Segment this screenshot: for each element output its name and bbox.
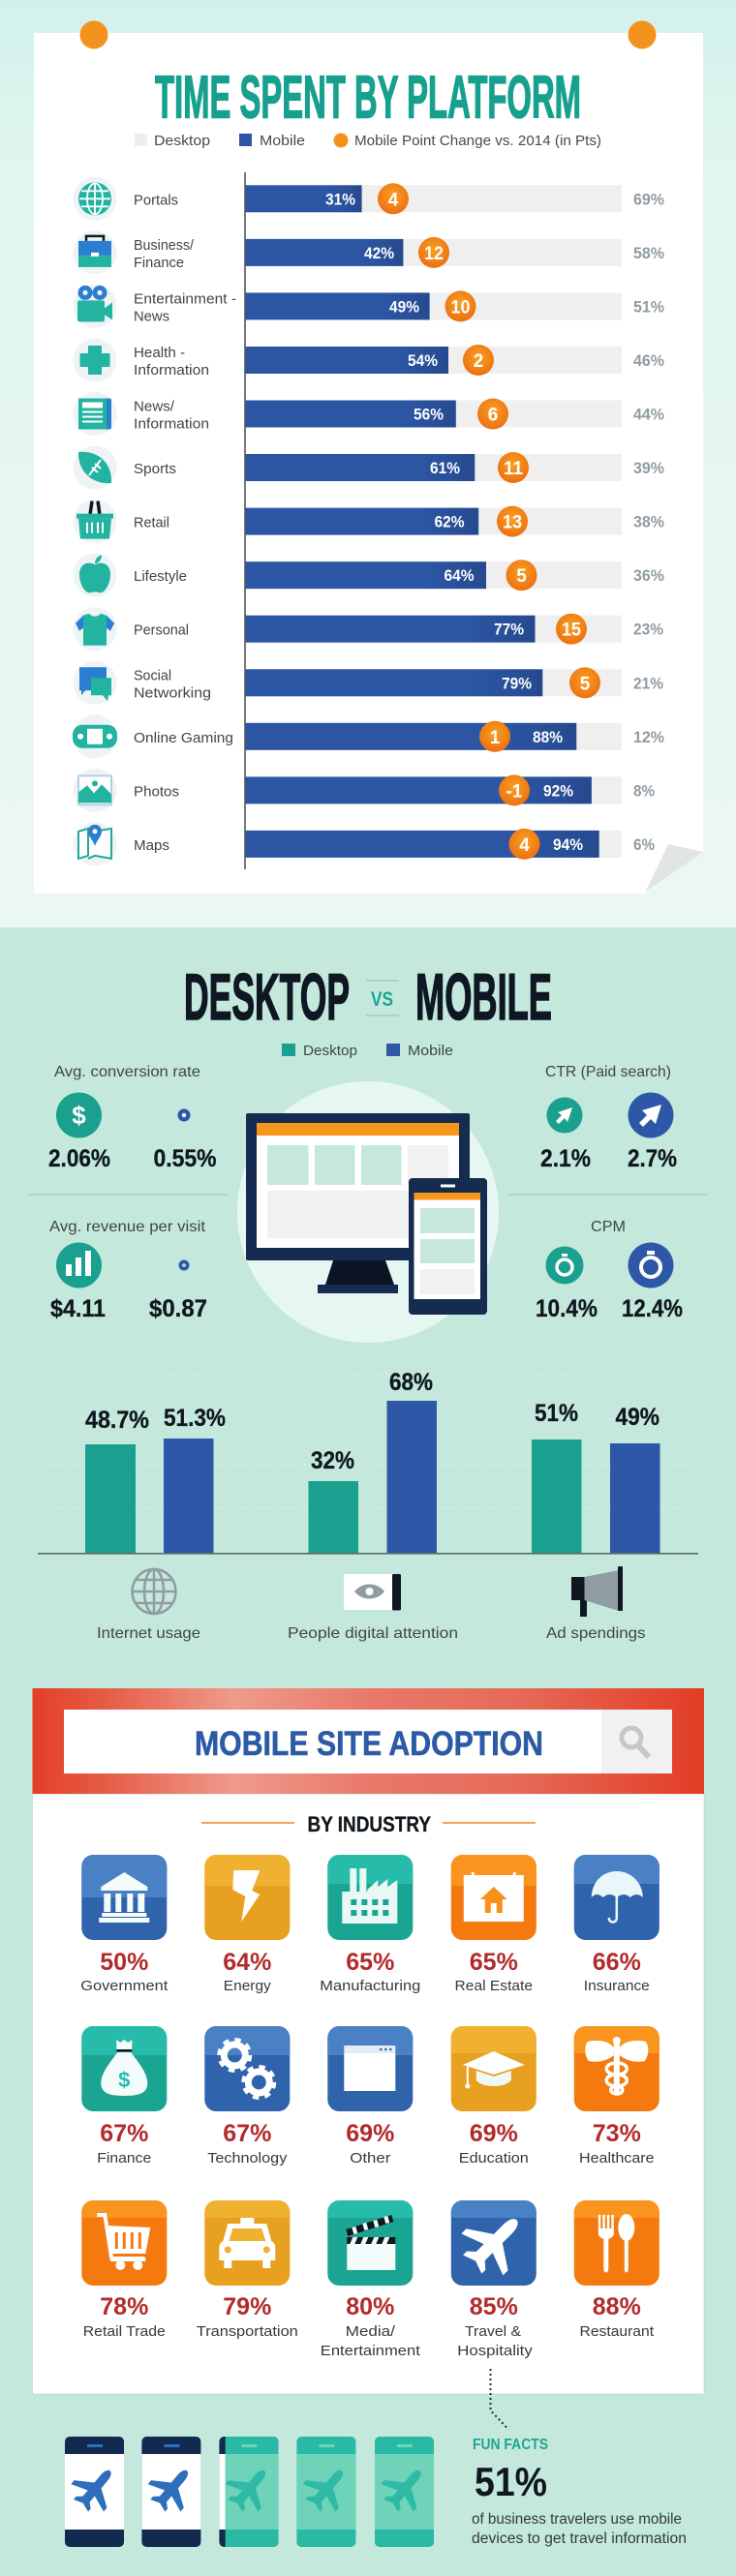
bar chart: usage, attention, ad spend: 48.7% [85,1407,149,1434]
row: Social Networking 79%: 21% [633,675,663,692]
stat: avg conversion rate [48,1064,217,1172]
bar chart: usage, attention, ad spend: 51% [535,1400,578,1427]
label: Education [459,2120,529,2167]
stat: CTR paid search: 2.7% [628,1145,677,1172]
label: Real Estate [455,1949,533,1994]
row: Lifestyle 64% [74,554,664,597]
icon: film camera [74,285,116,328]
stat: CTR paid search [540,1064,677,1172]
row: News/Information 56%: 6 [488,405,498,426]
tile: Education 69% [451,2026,537,2111]
row: Maps 94%: Maps [134,837,169,854]
label: Other: 69% [346,2120,394,2147]
illustration: desktop and phone [237,1081,499,1343]
tile: Transportation 79% [204,2200,290,2286]
stat: CPM [536,1219,683,1322]
bar chart: usage, attention, ad spend [38,1369,698,1555]
label: Media/Entertainment [321,2293,421,2359]
tile: Finance 67% [81,2026,167,2111]
bar chart: usage, attention, ad spend: 49% [616,1404,659,1431]
row: News/Information 56%: 56% [414,407,444,424]
label: Finance [97,2120,151,2167]
tile: Government 50% [81,1855,167,1940]
row: Photos 92%: -1 [506,781,523,802]
row: Retail 62%: 13 [503,513,522,533]
divider right [507,1194,707,1196]
icon: t-shirt [74,607,116,651]
stat: avg conversion rate: $ [72,1101,86,1130]
background: lower sections [0,927,736,2576]
row: Personal 77% [74,607,663,651]
stat: CPM: 10.4% [536,1295,598,1322]
row: Health - Information 54% [74,339,664,381]
row: Health - Information 54%: 46% [633,352,664,370]
phone 1 [65,2437,127,2547]
row: Health - Information 54%: 2 [474,351,483,372]
row: Entertainment - News 49%: News [134,308,169,324]
tile: Energy 64% [204,1855,290,1940]
stat: CPM: 12.4% [622,1295,683,1322]
row: Business/Finance 42%: 42% [364,245,394,262]
label: Media/Entertainment: Entertainment [321,2343,421,2359]
label: Retail Trade [83,2293,166,2340]
row: Social Networking 79%: Social [134,667,171,683]
label: Restaurant: 88% [593,2293,641,2320]
panel: fun fact phones [65,2437,687,2547]
label: ad spendings: Ad spendings [546,1625,645,1642]
label: Travel & Hospitality [457,2293,533,2359]
bar chart: usage, attention, ad spend: 32% [311,1447,354,1474]
icon: newspaper [74,392,116,436]
label: internet usage: Internet usage [97,1625,200,1642]
header: search bar: MOBILE SITE ADOPTION [195,1725,543,1763]
row: Entertainment - News 49%: 51% [633,298,664,316]
divider left [28,1194,228,1196]
tile: Insurance 66% [574,1855,659,1940]
row: Maps 94% [74,822,655,865]
bar chart: usage, attention, ad spend: 68% [389,1369,433,1396]
row: Retail 62% [74,500,664,543]
tile: Technology 67% [204,2026,290,2111]
phone 4 [296,2437,358,2547]
label: Education: Education [459,2150,529,2167]
row: Portals 31%: 4 [388,190,399,210]
background: top section [0,0,736,927]
label: Education: 69% [470,2120,518,2147]
label: Restaurant [580,2293,655,2340]
label: Energy [223,1949,271,1994]
row: Entertainment - News 49%: 49% [389,298,419,316]
subheading: by industry: BY INDUSTRY [308,1812,431,1836]
row: News/Information 56% [74,392,664,436]
stat: avg conversion rate: Avg. conversion rate [54,1064,200,1080]
label: Retail Trade: 78% [100,2293,148,2320]
row: Portals 31%: 31% [325,191,355,208]
tile: Other 69% [327,2026,413,2111]
row: Business/Finance 42%: 58% [633,245,664,262]
legend [282,1043,453,1059]
row: Portals 31%: 69% [633,191,664,208]
tile: Finance 67%: $ [118,2068,130,2092]
label: Healthcare [579,2120,655,2167]
row: Retail 62%: 62% [434,514,465,531]
label: Other [346,2120,394,2167]
row: Entertainment - News 49%: Entertainment - [134,290,236,307]
icon: football [74,445,116,490]
fun facts text: devices to get travel information [472,2531,687,2547]
row: Social Networking 79% [74,661,663,705]
fun facts text: FUN FACTS [473,2437,548,2453]
row: Social Networking 79%: 5 [580,674,591,694]
stat: CPM: CPM [591,1219,626,1235]
row: Health - Information 54%: 54% [408,352,438,370]
row: Sports 61%: Sports [134,461,176,477]
label: Manufacturing: Manufacturing [320,1978,420,1994]
label: Technology: Technology [207,2150,288,2167]
row: Photos 92%: 8% [633,782,655,800]
row: Health - Information 54%: Health - [134,345,185,361]
icon: globe [74,177,116,221]
row: Business/Finance 42% [74,230,664,274]
stat: CTR paid search: 2.1% [540,1145,591,1172]
stat: avg revenue per visit: $0.87 [149,1295,207,1322]
icon: medical cross [74,339,116,381]
row: Maps 94%: 4 [519,835,530,856]
heading: VS [371,988,393,1011]
label: Energy: Energy [224,1978,271,1994]
row: Online Gaming 88%: 1 [490,728,501,748]
row: Social Networking 79%: Networking [134,684,211,701]
row: Maps 94%: 6% [633,836,655,854]
row: Retail 62%: 38% [633,514,664,531]
label: Manufacturing: 65% [346,1949,394,1976]
card [33,1794,704,2394]
row: Online Gaming 88%: 12% [633,729,664,746]
phone 2 [141,2437,203,2547]
legend: Mobile [260,133,305,149]
row: Personal 77%: 23% [633,621,663,639]
row: Personal 77%: 77% [494,621,524,639]
row: Health - Information 54%: Information [134,362,209,379]
label: Finance: 67% [100,2120,148,2147]
callout connector: dotted line [490,2369,507,2428]
label: Healthcare: 73% [593,2120,641,2147]
icon: handheld console [73,714,117,758]
row: Photos 92%: Photos [134,783,179,800]
legend [135,133,601,149]
legend: Mobile [408,1043,453,1059]
row: Photos 92% [74,769,655,812]
label: Media/Entertainment: Media/ [346,2323,396,2340]
stat: avg revenue per visit: Avg. revenue per visit [49,1219,206,1235]
row: Business/Finance 42%: Finance [134,255,184,271]
label: Real Estate: 65% [470,1949,518,1976]
tile: Manufacturing 65% [327,1855,413,1940]
legend: Desktop [303,1043,357,1059]
label: Technology: 67% [223,2120,271,2147]
stat: CTR paid search: CTR (Paid search) [545,1064,671,1080]
stat: avg conversion rate: 2.06% [48,1145,110,1172]
row: Maps 94%: 94% [553,836,583,854]
panel: desktop vs mobile [28,960,707,1642]
heading: DESKTOP [184,960,350,1034]
icon: eye on phone [344,1574,401,1611]
label: Insurance: Insurance [584,1978,650,1994]
legend: Mobile Point Change vs. 2014 (in Pts) [354,133,601,149]
tile: Travel & Hospitality 85% [451,2199,537,2286]
icon: chat bubbles [74,661,116,705]
label: Technology [207,2120,288,2167]
label: Insurance: 66% [593,1949,641,1976]
tile: Healthcare 73% [574,2026,659,2111]
label: Travel & Hospitality: Hospitality [457,2343,533,2359]
row: Lifestyle 64%: Lifestyle [134,568,187,585]
tile: Real Estate 65% [451,1855,537,1940]
row: News/Information 56%: 44% [633,407,664,424]
row: Business/Finance 42%: 12 [424,244,444,264]
label: Transportation: Transportation [197,2323,298,2340]
row: Photos 92%: 92% [543,782,573,800]
row: Entertainment - News 49% [74,285,664,328]
panel: time spent by platform [34,21,703,894]
icon: briefcase [74,230,116,274]
row: Portals 31% [74,177,664,221]
fun facts text: 51% [475,2459,547,2504]
label: Other: Other [350,2150,390,2167]
row: Online Gaming 88% [73,714,664,758]
label: Transportation: 79% [223,2293,271,2320]
bar chart: usage, attention, ad spend: 51.3% [164,1405,226,1432]
row: Online Gaming 88%: 88% [533,729,563,746]
row: Entertainment - News 49%: 10 [451,297,471,318]
label: Energy: 64% [223,1949,271,1976]
label: Transportation [197,2293,298,2340]
stat: avg revenue per visit: $4.11 [50,1295,106,1322]
label: Government: 50% [100,1949,148,1976]
row: Retail 62%: Retail [134,515,169,531]
label: Travel & Hospitality: Travel & [465,2323,521,2340]
card with folded corner [34,33,703,894]
row: Lifestyle 64%: 36% [633,567,664,585]
row: Sports 61%: 11 [504,459,523,479]
label: Retail Trade: Retail Trade [83,2323,166,2340]
row: Online Gaming 88%: Online Gaming [134,730,233,746]
pin left [79,21,108,48]
icon: apple [74,554,116,597]
panel: mobile site adoption [33,1688,704,2394]
label: Media/Entertainment: 80% [346,2293,394,2320]
fun facts text: of business travelers use mobile [472,2511,682,2528]
row: Personal 77%: 15 [562,621,581,641]
icon: basket [74,500,116,543]
label: Manufacturing [320,1949,420,1994]
row: Sports 61%: 61% [430,460,460,477]
phone 5 [375,2437,437,2547]
row: Business/Finance 42%: Business/ [134,237,195,254]
icon: globe [132,1569,176,1614]
chart axis [244,172,246,869]
tile: Media/Entertainment 80% [327,2200,413,2286]
label: Travel & Hospitality: 85% [470,2293,518,2320]
icon: megaphone [571,1566,623,1617]
tile: Retail Trade 78% [81,2200,167,2286]
row: Sports 61% [74,445,664,490]
label: Insurance [584,1949,650,1994]
tile: Restaurant 88% [574,2200,659,2286]
header: search bar [33,1688,704,1794]
row: Sports 61%: 39% [633,460,664,477]
icon: photo [74,769,116,812]
row: News/Information 56%: News/ [134,399,175,414]
row: Social Networking 79%: 79% [502,675,532,692]
icon: map with pin [74,822,116,865]
label: Restaurant: Restaurant [580,2323,655,2340]
row: Lifestyle 64%: 64% [444,567,475,585]
label: Finance: Finance [97,2150,151,2167]
row: Personal 77%: Personal [134,622,189,639]
row: Portals 31%: Portals [134,192,178,208]
row: News/Information 56%: Information [134,416,209,432]
label: Government: Government [80,1978,169,1994]
heading: MOBILE [415,960,552,1034]
label: people digital attention: People digital attention [288,1625,458,1642]
stat: avg revenue per visit [49,1219,207,1322]
label: Government [80,1949,169,1994]
label: Healthcare: Healthcare [579,2150,655,2167]
phone 3 [219,2437,281,2547]
row: Lifestyle 64%: 5 [516,566,527,587]
pin right [628,21,657,48]
stat: avg conversion rate: 0.55% [153,1145,217,1172]
label: Real Estate: Real Estate [455,1978,533,1994]
fun facts text [472,2437,687,2547]
legend: Desktop [154,133,210,149]
